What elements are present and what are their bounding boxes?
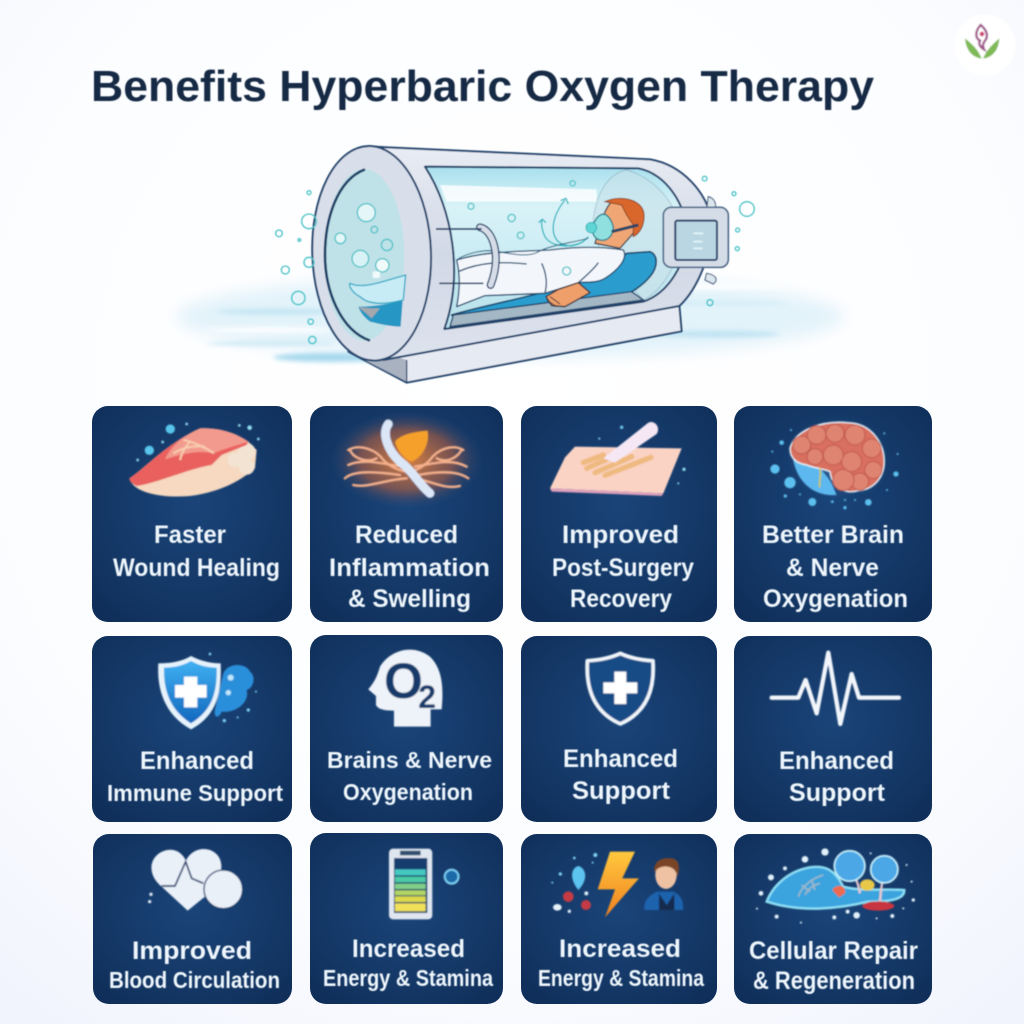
label: & Swelling (348, 585, 471, 613)
card: Enhanced Support (pulse) (734, 636, 932, 822)
label: & Regeneration (753, 967, 915, 995)
card: Better Brain & Nerve Oxygenation (734, 406, 932, 622)
card: Increased Energy & Stamina (battery) (310, 833, 503, 1004)
label: Better Brain (762, 521, 904, 549)
card: Brains & Nerve Oxygenation (310, 635, 503, 822)
label: Post-Surgery (552, 554, 694, 582)
icon: healing wound (129, 423, 260, 497)
card: Increased Energy & Stamina (bolt) (521, 834, 717, 1004)
label: Inflammation (329, 554, 490, 582)
label (113, 521, 280, 582)
label: Improved (132, 937, 252, 965)
label (563, 745, 678, 805)
label: Reduced (355, 521, 458, 549)
oxygen tube and arrows (457, 198, 588, 260)
label (109, 937, 280, 993)
icon: heart and cell (148, 849, 243, 911)
end ring (309, 144, 435, 363)
label (323, 935, 493, 991)
icon: surgical skin closure (550, 422, 686, 496)
label: Enhanced (140, 747, 254, 775)
label: Recovery (570, 585, 672, 613)
logo (954, 14, 1016, 76)
label: Support (572, 777, 671, 805)
label: Energy & Stamina (538, 965, 704, 991)
icon: head with O2: 2 (418, 679, 436, 715)
card: Reduced Inflammation & Swelling (310, 406, 503, 622)
label (749, 937, 918, 995)
icon: immune shield (158, 653, 257, 729)
label (107, 747, 283, 806)
patient on stretcher (450, 198, 656, 327)
large window (425, 167, 687, 329)
side control panel (663, 197, 728, 284)
label (552, 521, 694, 613)
label: Cellular Repair (749, 937, 918, 965)
label (327, 747, 492, 805)
icon: outline shield (587, 653, 653, 724)
card: Cellular Repair & Regeneration (734, 834, 932, 1004)
icon: inflamed tissue (328, 410, 485, 510)
title: Benefits Hyperbaric Oxygen Therapy (91, 62, 875, 111)
label: Increased (352, 935, 465, 963)
card: Enhanced Support (shield) (521, 636, 717, 822)
label: Enhanced (779, 747, 894, 775)
restraint band (436, 227, 496, 285)
bubbles (276, 176, 754, 344)
icon: battery device (389, 849, 459, 919)
label: & Nerve (786, 554, 879, 582)
label: Improved (562, 521, 679, 549)
label: Enhanced (563, 745, 678, 773)
card: Improved Post-Surgery Recovery (521, 406, 717, 622)
label (762, 521, 908, 613)
label: Oxygenation (763, 585, 908, 613)
label: Blood Circulation (109, 967, 280, 993)
label: Oxygenation (343, 779, 473, 805)
chamber base (348, 305, 682, 383)
hyperbaric chamber illustration (177, 144, 843, 383)
icon: head with O2: O (384, 653, 423, 709)
icon: head with O2 (368, 650, 442, 727)
icon: cellular repair (756, 848, 915, 924)
chamber body (373, 147, 712, 360)
water reflection (177, 275, 843, 362)
label: Wound Healing (113, 554, 280, 582)
label: Support (789, 779, 886, 807)
label: Brains & Nerve (327, 747, 492, 773)
label: Increased (559, 935, 681, 963)
card: Faster Wound Healing (92, 406, 292, 622)
label (779, 747, 894, 807)
label: Immune Support (107, 780, 283, 806)
icon: heartbeat line (772, 653, 899, 724)
label (329, 521, 490, 613)
icon: brain (770, 412, 899, 509)
label (538, 935, 704, 991)
card: Enhanced Immune Support (92, 636, 292, 822)
card: Improved Blood Circulation (93, 834, 292, 1004)
label: Energy & Stamina (323, 965, 493, 991)
label: Faster (154, 521, 226, 549)
icon: energy bolt and person (551, 852, 683, 917)
